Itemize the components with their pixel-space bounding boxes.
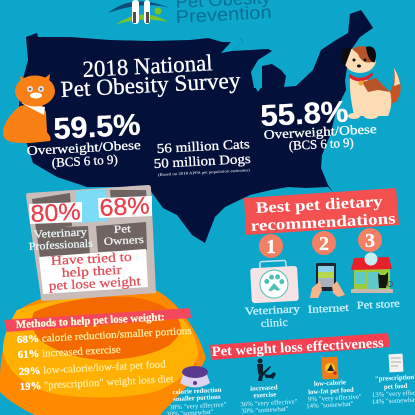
- column: increased exercise: 30% "somewhat": [241, 406, 289, 415]
- callout: have tried: [39, 249, 148, 294]
- banner: best pet dietary recommendations: [244, 188, 399, 235]
- stat: 80% veterinary: [29, 198, 93, 253]
- stat: dogs 55.8%: Overweight/Obese: [263, 121, 377, 142]
- banner: methods heading: [4, 308, 191, 332]
- column: calorie reduction: [166, 387, 227, 415]
- column: increased exercise: [240, 384, 298, 415]
- column: calorie reduction: 38% "very effective": [169, 402, 227, 411]
- column: calorie reduction: calorie reduction: [172, 387, 222, 396]
- column: increased exercise: exercise: [253, 391, 277, 400]
- stat: pet population: [153, 136, 251, 177]
- stat: 80% veterinary: Professionals: [29, 238, 93, 253]
- stat: 80% veterinary: Veterinary: [34, 226, 88, 241]
- title: 2018 National: [82, 50, 213, 82]
- text: logo name: Prevention: [175, 2, 272, 27]
- text: recommendation labels: Pet store: [357, 298, 400, 312]
- text: methods list: [17, 326, 192, 393]
- rank: number 1: [259, 234, 283, 258]
- icon: veterinary case: [250, 260, 299, 303]
- stat: cats 59.5%: [26, 108, 141, 170]
- panel: weighing scale survey: [26, 185, 156, 301]
- callout: have tried: help their: [61, 262, 123, 280]
- column: prescription food: pet food: [384, 383, 408, 391]
- rank: number 2: 2: [319, 233, 329, 255]
- rank: number 3: [358, 228, 382, 252]
- icon: purple food bowl: [180, 366, 210, 388]
- stat: 68% owners: Owners: [104, 234, 144, 248]
- icon: phone in hands: [310, 263, 345, 298]
- stat: dogs 55.8%: (BCS 6 to 9): [288, 135, 354, 153]
- stat: pet population: 56 million Cats: [156, 136, 250, 156]
- icon: person walking dog: [257, 358, 276, 381]
- icon: pet store: [351, 252, 393, 293]
- icon: dog: [342, 46, 401, 119]
- text: recommendation labels: [245, 298, 400, 330]
- icon: logo arcs: [108, 0, 170, 25]
- text: methods list: 29% low-calorie/low-fat pet food: [19, 359, 167, 378]
- title: [60, 50, 242, 102]
- callout: have tried: pet lose weight: [48, 273, 141, 293]
- stat: 80% veterinary: 80%: [30, 198, 81, 228]
- banner: best pet dietary recommendations: Best pet dietary: [255, 193, 383, 217]
- column: low-calorie food: low-fat pet food: [308, 387, 354, 396]
- text: methods list: 68% calorie reduction/smaller portions: [17, 326, 192, 346]
- banner: methods heading: Methods to help pet lose weight:: [16, 311, 165, 331]
- text: methods list: 61% increased exercise: [18, 345, 121, 361]
- panel: pet bowl methods: [0, 286, 206, 415]
- stat: cats 59.5%: 59.5%: [53, 108, 141, 146]
- callout: have tried: Have tried to: [50, 249, 132, 268]
- column: low-calorie food: 9% "very effective": [308, 394, 362, 403]
- stat: pet population: (Based on 2018 APPA pet population estimates): [158, 168, 251, 177]
- title: Pet Obesity Survey: [60, 68, 242, 102]
- banner: pet weight loss effectiveness: Pet weight loss effectiveness: [211, 336, 385, 360]
- rank: number 3: 3: [365, 230, 375, 252]
- stat: 68% owners: 68%: [99, 192, 150, 222]
- text: recommendation labels: Veterinary: [245, 303, 301, 318]
- column: calorie reduction: smaller portions: [173, 394, 221, 403]
- stat: dogs 55.8%: [260, 95, 377, 153]
- icon: prescription paper: [389, 354, 403, 372]
- icon: low-calorie food bag: [321, 357, 339, 379]
- column: prescription food: [372, 374, 415, 406]
- column: low-calorie food: low-calorie: [314, 379, 346, 388]
- text: methods list: 19% "prescription" weight loss diet: [20, 374, 174, 393]
- stat: cats 59.5%: Overweight/Obese: [26, 137, 141, 158]
- column: low-calorie food: 14% "somewhat": [306, 401, 354, 410]
- column: increased exercise: 36% "very effective": [240, 399, 298, 408]
- banner: best pet dietary recommendations: recommendations: [250, 210, 396, 235]
- stat: 68% owners: Pet: [114, 223, 131, 236]
- text: recommendation labels: clinic: [261, 317, 288, 330]
- rank: number 2: [312, 231, 336, 255]
- icon: orange cat: [3, 74, 55, 143]
- stat: cats 59.5%: (BCS 6 to 9): [51, 152, 118, 170]
- column: increased exercise: increased: [250, 384, 278, 393]
- stat: 68% owners: [98, 192, 152, 248]
- column: low-calorie food: [306, 379, 362, 410]
- logo: Pet Obesity Prevention: [108, 0, 272, 27]
- rank: number 1: 1: [266, 236, 276, 258]
- stat: pet population: 50 million Dogs: [153, 151, 251, 171]
- map: United States silhouette: [18, 10, 373, 243]
- text: recommendation labels: Internet: [308, 302, 349, 316]
- stat: dogs 55.8%: 55.8%: [260, 95, 349, 133]
